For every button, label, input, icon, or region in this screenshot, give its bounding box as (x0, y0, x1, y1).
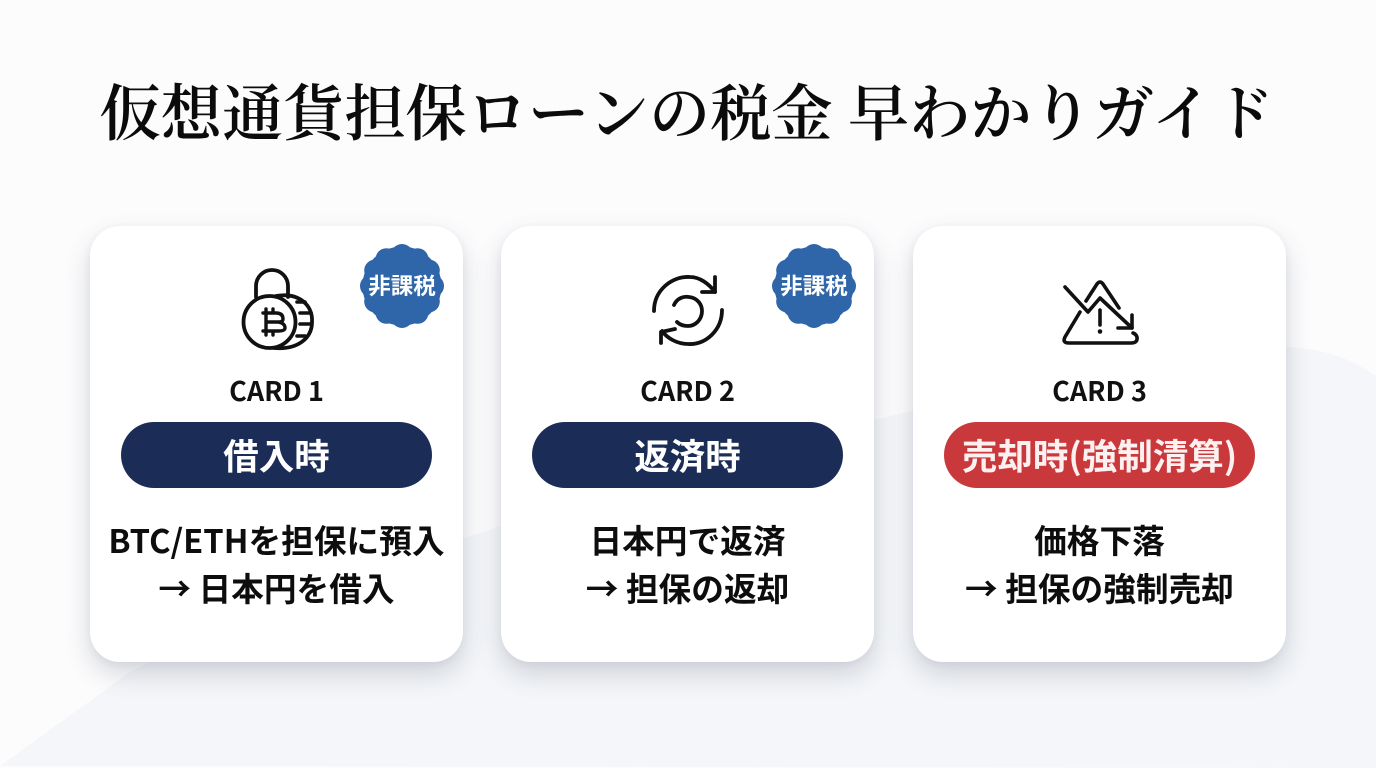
pill heading (121, 422, 432, 488)
body text: BTC/ETHを担保に預入 (108, 516, 445, 563)
body text: → 担保の返却 (586, 564, 789, 611)
badge: tax free: 非課税 (780, 269, 848, 301)
body text: → 担保の強制売却 (965, 564, 1234, 611)
pill heading: 借入時 (223, 429, 330, 480)
icon: refresh cycle (652, 275, 724, 346)
icon: price drop warning (1062, 280, 1139, 345)
panel: card 1 (90, 226, 463, 662)
pill heading: 売却時(強制清算) (962, 429, 1237, 480)
badge: tax free (772, 244, 856, 328)
body text: 日本円で返済 (589, 516, 786, 563)
badge: tax free (360, 244, 444, 328)
pill heading (944, 422, 1255, 488)
body text (586, 516, 789, 611)
title: 仮想通貨担保ローンの税金 早わかりガイド (100, 81, 1274, 149)
body text: 価格下落 (1034, 516, 1165, 563)
body text (965, 516, 1234, 611)
card label: CARD 3 (1052, 370, 1147, 409)
body text (108, 516, 445, 611)
panel: card 3 (913, 226, 1286, 662)
badge: tax free: 非課税 (368, 269, 436, 301)
card label: CARD 1 (229, 370, 324, 409)
panel: card 2 (501, 226, 874, 662)
body text: → 日本円を借入 (158, 564, 395, 611)
pill heading: 返済時 (634, 429, 741, 480)
icon: bitcoin lock (242, 268, 314, 350)
card label: CARD 2 (640, 370, 735, 409)
pill heading (532, 422, 843, 488)
